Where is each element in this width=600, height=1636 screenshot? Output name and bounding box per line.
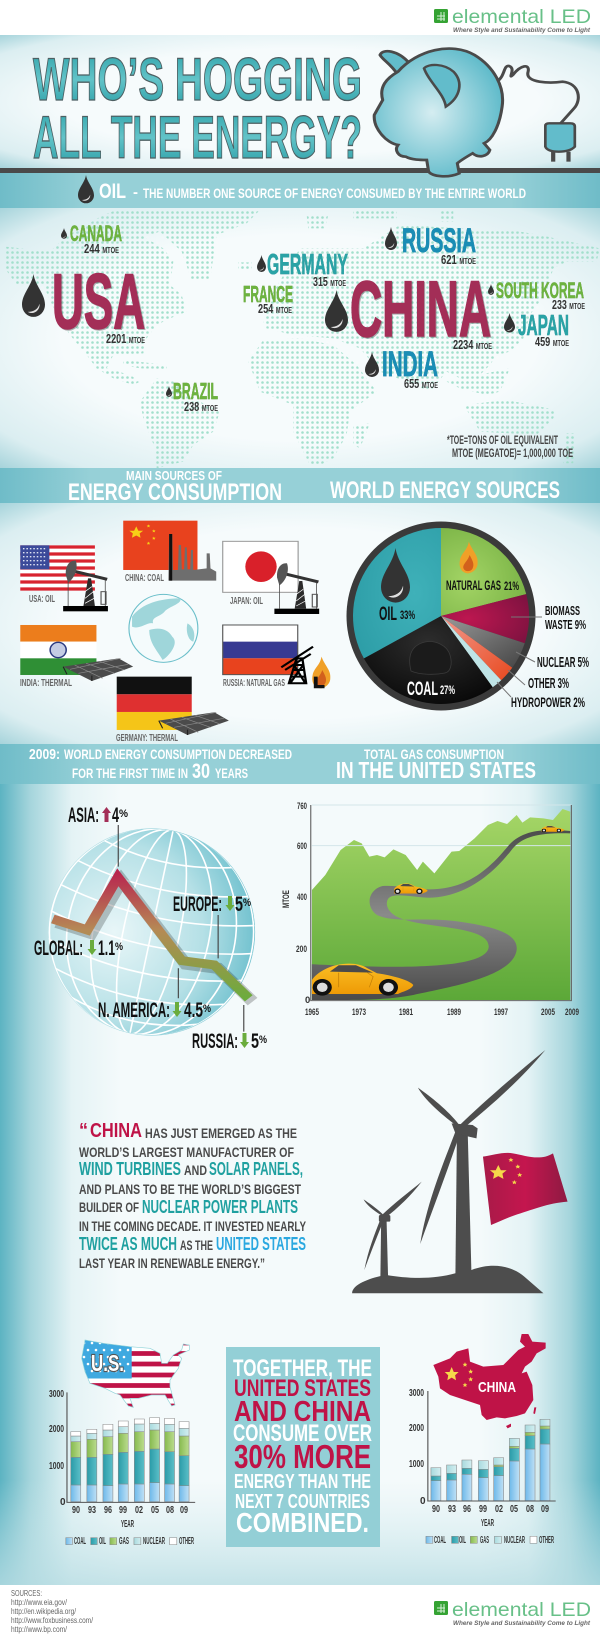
slice: natural gas [441, 528, 526, 616]
band: 2009 and gas headings [0, 744, 600, 784]
axis labels: 760 [297, 801, 307, 812]
flag labels [20, 573, 285, 744]
chart text: OIL [459, 1535, 466, 1546]
map footnote [447, 433, 573, 460]
map: China [433, 1334, 546, 1428]
country: Russia: 621 MTOE [441, 252, 476, 267]
sources list: http://www.eia.gov/ [11, 1598, 68, 1607]
flag labels: RUSSIA: NATURAL GAS [223, 678, 285, 689]
country: France: 254 MTOE [258, 301, 292, 316]
slice: nuclear [441, 616, 525, 668]
title [33, 46, 362, 171]
logo: top [434, 6, 591, 34]
quote: China renewable energy [79, 1120, 306, 1271]
slice: oil [353, 528, 441, 658]
pie labels: NATURAL GAS [446, 577, 501, 593]
country: Japan: 459 MTOE [535, 334, 569, 349]
title: WHO’S HOGGING [33, 46, 362, 113]
chart text: GAS [119, 1536, 129, 1547]
icon: flame [460, 542, 478, 573]
quote: China renewable energy: BUILDER OF [79, 1199, 139, 1215]
flag: China waving [483, 1153, 568, 1225]
callout: together the US and China: COMBINED. [236, 1507, 369, 1538]
bars [431, 1419, 550, 1501]
label: Asia: ASIA: [68, 804, 99, 827]
quote: China renewable energy: UNITED STATES [216, 1233, 306, 1254]
chart text: OIL [99, 1536, 106, 1547]
slice: other [441, 616, 512, 680]
country: Canada: 244 MTOE [84, 241, 119, 256]
label: Asia: 4 [112, 804, 119, 827]
callout: together the US and China: ENERGY THAN THE [234, 1471, 371, 1493]
flag labels: USA: OIL [29, 594, 55, 605]
band: oil headline [0, 168, 600, 208]
axis labels: 600 [297, 841, 307, 852]
axis labels: MTOE [281, 890, 292, 908]
callout: together the US and China [226, 1347, 380, 1547]
map: United States flag: U.S. [91, 1350, 124, 1376]
axis labels: 400 [297, 892, 307, 903]
callout: together the US and China: UNITED STATES [234, 1375, 371, 1402]
flag labels: CHINA: COAL [125, 573, 164, 584]
text: OTHER [179, 1536, 194, 1547]
country: Brazil: 238 MTOE [184, 399, 218, 414]
country: Russia: RUSSIA [402, 222, 476, 260]
pie labels: 21% [504, 579, 519, 593]
label: Russia: 5 [251, 1030, 259, 1053]
quote: China renewable energy: AND [184, 1162, 207, 1178]
country: Brazil: BRAZIL [173, 378, 218, 404]
chart text: 90 [72, 1505, 80, 1516]
slice: coal [364, 616, 493, 704]
axis labels: 0 [305, 995, 310, 1006]
pie labels: OIL [379, 604, 397, 625]
quote: China renewable energy: IN THE COMING DECADE. IT INVESTED NEARLY [79, 1218, 306, 1234]
chart text: 1000 [409, 1459, 424, 1470]
chart text: 0 [420, 1496, 426, 1507]
quote: China renewable energy: “ [79, 1120, 88, 1142]
flag labels: INDIA: THERMAL [20, 678, 72, 689]
icon: wind turbines and flag [352, 1050, 568, 1293]
label: Europe: % [243, 897, 251, 909]
flag labels: GERMANY: THERMAL [116, 733, 178, 744]
chart text [49, 1389, 194, 1547]
axis labels: 2009 [565, 1007, 579, 1018]
callout: together the US and China: AND CHINA [234, 1396, 371, 1428]
label: Global: GLOBAL: [34, 937, 83, 960]
band: 2009 and gas headings: 2009: [29, 746, 60, 763]
chart text: 93 [88, 1505, 96, 1516]
chart text: 93 [448, 1504, 456, 1515]
axis labels: 1973 [352, 1007, 366, 1018]
country: Germany [257, 249, 348, 289]
country: China: CHINA [350, 264, 491, 353]
legend swatches [426, 1536, 537, 1543]
quote: China renewable energy: TWICE AS MUCH [79, 1233, 177, 1254]
sources list: http://www.foxbusiness.com/ [11, 1616, 94, 1625]
bars [71, 1418, 189, 1502]
country: Japan [504, 310, 569, 349]
sources list: SOURCES: [11, 1589, 42, 1598]
chart text: 90 [432, 1504, 440, 1515]
country: USA [22, 257, 145, 346]
chart text: YEAR [481, 1518, 494, 1529]
chart text: 08 [166, 1505, 174, 1516]
pie labels [379, 577, 589, 710]
quote: China renewable energy: LAST YEAR IN RENEWABLE ENERGY.” [79, 1255, 265, 1271]
label: Asia: % [119, 808, 128, 820]
chart text: 96 [463, 1504, 471, 1515]
callout: together the US and China: NEXT 7 COUNTRIES [235, 1491, 370, 1513]
flag: Russia natural gas [223, 625, 330, 688]
chart text: 3000 [49, 1389, 64, 1400]
label: North America: % [203, 1003, 211, 1015]
pie labels: COAL [407, 679, 438, 700]
band: section headings [0, 468, 600, 506]
flag: USA oil [20, 545, 108, 611]
label: Russia: RUSSIA: [192, 1030, 238, 1053]
band: 2009 and gas headings: TOTAL GAS CONSUMPTION [364, 746, 504, 762]
chart text: 2000 [49, 1424, 64, 1435]
axis labels: 1965 [305, 1007, 319, 1018]
chart text: 02 [495, 1504, 503, 1515]
axis labels: 200 [296, 944, 307, 955]
flag: China coal [123, 521, 216, 581]
label: Europe: 5 [235, 893, 243, 916]
country: USA: 2201 MTOE [106, 331, 145, 346]
band: section headings: MAIN SOURCES OF [126, 468, 222, 483]
chart text: 09 [180, 1505, 188, 1516]
sources list: http://en.wikipedia.org/ [11, 1607, 77, 1616]
globe chart: 2009 consumption change [29, 804, 274, 1055]
chart text: 08 [526, 1504, 534, 1515]
country: India [365, 345, 438, 391]
flag: Germany thermal [117, 677, 229, 735]
title: ALL THE ENERGY? [33, 104, 362, 171]
logo: bottom: elemental LED [452, 1599, 591, 1621]
ground and towers [352, 1050, 545, 1293]
quote: China renewable energy: WIND TURBINES [79, 1158, 181, 1179]
flag: Japan oil [223, 541, 319, 614]
chart text: 09 [541, 1504, 549, 1515]
map: China: CHINA [478, 1379, 516, 1396]
flag labels: JAPAN: OIL [230, 596, 263, 607]
quote: China renewable energy: AS THE [180, 1237, 213, 1253]
country: Russia [385, 222, 476, 267]
axis labels [281, 801, 579, 1018]
label: Europe: EUROPE: [173, 893, 222, 916]
label: Global: 1.1 [98, 937, 115, 960]
chart text: COAL [434, 1535, 446, 1546]
callout: together the US and China: CONSUME OVER [233, 1420, 372, 1447]
country: USA: USA [52, 257, 145, 345]
country: France [243, 281, 293, 316]
icon: oil drop [381, 548, 410, 603]
chart text: 05 [151, 1505, 159, 1516]
country: France: FRANCE [243, 281, 293, 307]
band: section headings: ENERGY CONSUMPTION [68, 479, 282, 506]
icon: coal lump [410, 642, 451, 674]
slice: hydropower [441, 616, 501, 687]
axis labels: 1989 [447, 1007, 461, 1018]
callout: together the US and China: TOGETHER, THE [233, 1355, 372, 1382]
logo: top: Where Style and Sustainability Come to Light [453, 27, 591, 34]
band: oil headline: OIL [99, 180, 126, 203]
trend line [53, 825, 253, 1032]
callout: together the US and China: 30% MORE [234, 1438, 371, 1475]
quote: China renewable energy: AND PLANS TO BE THE WORLD’S BIGGEST [79, 1181, 301, 1197]
country: Canada: CANADA [70, 221, 122, 246]
chart text: 99 [479, 1504, 487, 1515]
quote: China renewable energy: NUCLEAR POWER PLANTS [142, 1196, 298, 1217]
country: Canada [61, 221, 122, 256]
axis labels: 1981 [399, 1007, 413, 1018]
country: Germany: 315 MTOE [313, 274, 346, 289]
chart text: YEAR [121, 1519, 134, 1530]
text: OTHER [539, 1535, 554, 1546]
bar chart: China consumption [409, 1388, 556, 1546]
chart text: NUCLEAR [504, 1535, 525, 1546]
band: 2009 and gas headings: YEARS [215, 765, 248, 781]
band: oil headline: - [133, 184, 138, 201]
country: Brazil [166, 378, 218, 414]
icon: globe [129, 594, 198, 662]
area chart: US gas consumption road [281, 801, 579, 1018]
band: 2009 and gas headings: IN THE UNITED STATES [336, 757, 536, 783]
map: United States flag [81, 1340, 190, 1408]
country: South Korea [488, 278, 585, 312]
country: China [325, 264, 492, 353]
country: India: INDIA [382, 345, 438, 384]
cars [312, 826, 565, 996]
chart text: 2000 [409, 1423, 424, 1434]
pie labels: 27% [440, 683, 455, 697]
sources list: http://www.bp.com/ [11, 1625, 68, 1634]
legend swatches [66, 1538, 177, 1545]
chart text: COAL [74, 1536, 86, 1547]
band: 2009 and gas headings: 30 [192, 760, 210, 783]
winding road [312, 830, 570, 1000]
bar chart: US consumption [49, 1389, 195, 1547]
panel: main sources flags [20, 521, 330, 744]
axis labels: 2005 [541, 1007, 555, 1018]
logo: bottom: Where Style and Sustainability Come to Light [453, 1620, 591, 1627]
chart text: 3000 [409, 1388, 424, 1399]
pie chart: world energy sources [346, 522, 589, 710]
quote: China renewable energy: SOLAR PANELS, [209, 1158, 303, 1179]
country: India: 655 MTOE [404, 376, 438, 391]
chart text: 99 [119, 1505, 127, 1516]
logo: top: elemental LED [452, 6, 591, 28]
chart text: NUCLEAR [143, 1536, 165, 1547]
label: North America: 4.5 [184, 999, 203, 1022]
chart text: 05 [510, 1504, 518, 1515]
axis labels: 1997 [494, 1007, 508, 1018]
green hill area [312, 809, 570, 1000]
quote: China renewable energy: HAS JUST EMERGED AS THE [145, 1125, 297, 1141]
label: Global: % [115, 941, 123, 953]
world dot map [0, 205, 600, 470]
chart text: 02 [135, 1505, 143, 1516]
band: 2009 and gas headings: FOR THE FIRST TIME IN [72, 765, 188, 781]
quote: China renewable energy: WORLD’S LARGEST MANUFACTURER OF [79, 1144, 294, 1160]
slice: biomass [441, 594, 529, 643]
sources list [11, 1589, 94, 1634]
label: Russia: % [259, 1034, 267, 1046]
chart text: GAS [480, 1535, 489, 1546]
chart text: 0 [60, 1497, 66, 1508]
country: Germany: GERMANY [267, 249, 348, 281]
country: China: 2234 MTOE [453, 337, 492, 352]
country: South Korea: 233 MTOE [552, 297, 585, 312]
quote: China renewable energy: CHINA [90, 1120, 142, 1142]
chart text: 1000 [49, 1461, 64, 1472]
band: 2009 and gas headings: WORLD ENERGY CONSUMPTION DECREASED [64, 746, 292, 762]
label: North America: N. AMERICA: [98, 999, 170, 1022]
logo: bottom [434, 1599, 591, 1627]
icon: piggy bank with plug [374, 49, 578, 176]
chart text: 96 [104, 1505, 112, 1516]
flag: India thermal [20, 625, 133, 681]
pie labels: 33% [400, 608, 415, 622]
chart text [409, 1388, 554, 1546]
